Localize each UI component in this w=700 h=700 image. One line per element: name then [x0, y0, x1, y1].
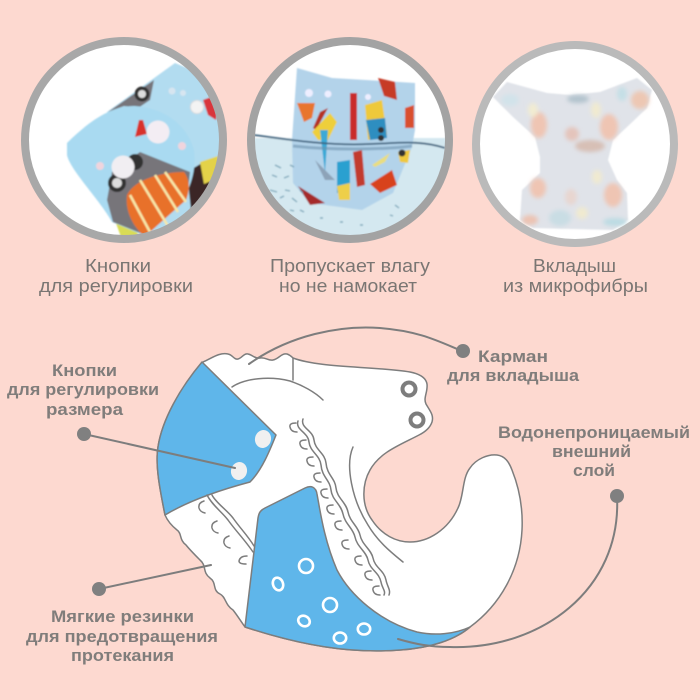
inner leg curve [350, 447, 403, 562]
callout: outer layer label: внешний [552, 442, 631, 461]
callout: elastic label: для предотвращения [26, 627, 218, 646]
diagram: diaper [157, 354, 522, 651]
callout: outer layer label [498, 423, 690, 480]
front panel blue [245, 487, 470, 651]
caption: snap buttons: для регулировки [39, 275, 193, 296]
caption: insert: Вкладыш [533, 255, 616, 276]
callout: snaps leader [77, 427, 235, 468]
callout: pocket label [447, 347, 580, 385]
flap [67, 106, 195, 235]
callout: outer layer label: слой [573, 461, 615, 480]
waterline [254, 135, 445, 148]
caption: snap buttons: Кнопки [85, 255, 151, 276]
elastic hooks [199, 423, 380, 595]
diaper white body [157, 354, 522, 651]
blue panel rings [271, 559, 370, 644]
callout: elastic label: Мягкие резинки [51, 607, 194, 626]
callout: outer layer label: Водонепроницаемый [498, 423, 690, 442]
caption: water resistant: Пропускает влагу [270, 255, 431, 276]
panel: microfibre insert photo [476, 45, 674, 243]
elastic wave left [207, 495, 254, 552]
callout: pocket label: Карман [478, 347, 548, 366]
caption: water resistant: но не намокает [279, 275, 418, 296]
grey tab snaps [402, 382, 424, 426]
callout: pocket label: для вкладыша [447, 366, 580, 385]
top seam lines [232, 358, 323, 400]
caption: water resistant [270, 255, 431, 296]
diaper [292, 68, 415, 210]
panel: snap buttons photo [25, 41, 240, 250]
caption: snap buttons [39, 255, 193, 296]
callout: outer layer leader [398, 489, 624, 647]
back fabric [106, 62, 219, 232]
callout: pocket leader [249, 327, 470, 364]
callout: snaps label: для регулировки [7, 380, 159, 399]
splash bubbles [270, 165, 399, 225]
insert [493, 78, 652, 230]
callout: snaps label: Кнопки [52, 361, 117, 380]
caption: insert: из микрофибры [503, 275, 648, 296]
callout: elastic label: протекания [71, 646, 174, 665]
panel: water resistant photo [250, 41, 450, 248]
callout: snaps label: размера [46, 400, 124, 419]
callout: snaps label [7, 361, 159, 419]
elastic wave right [298, 419, 390, 595]
callout: elastic leader [92, 565, 211, 596]
caption: insert [503, 255, 648, 296]
white snaps [253, 428, 273, 450]
water [255, 137, 445, 235]
side panel blue [157, 362, 276, 515]
callout: elastic label [26, 607, 218, 665]
